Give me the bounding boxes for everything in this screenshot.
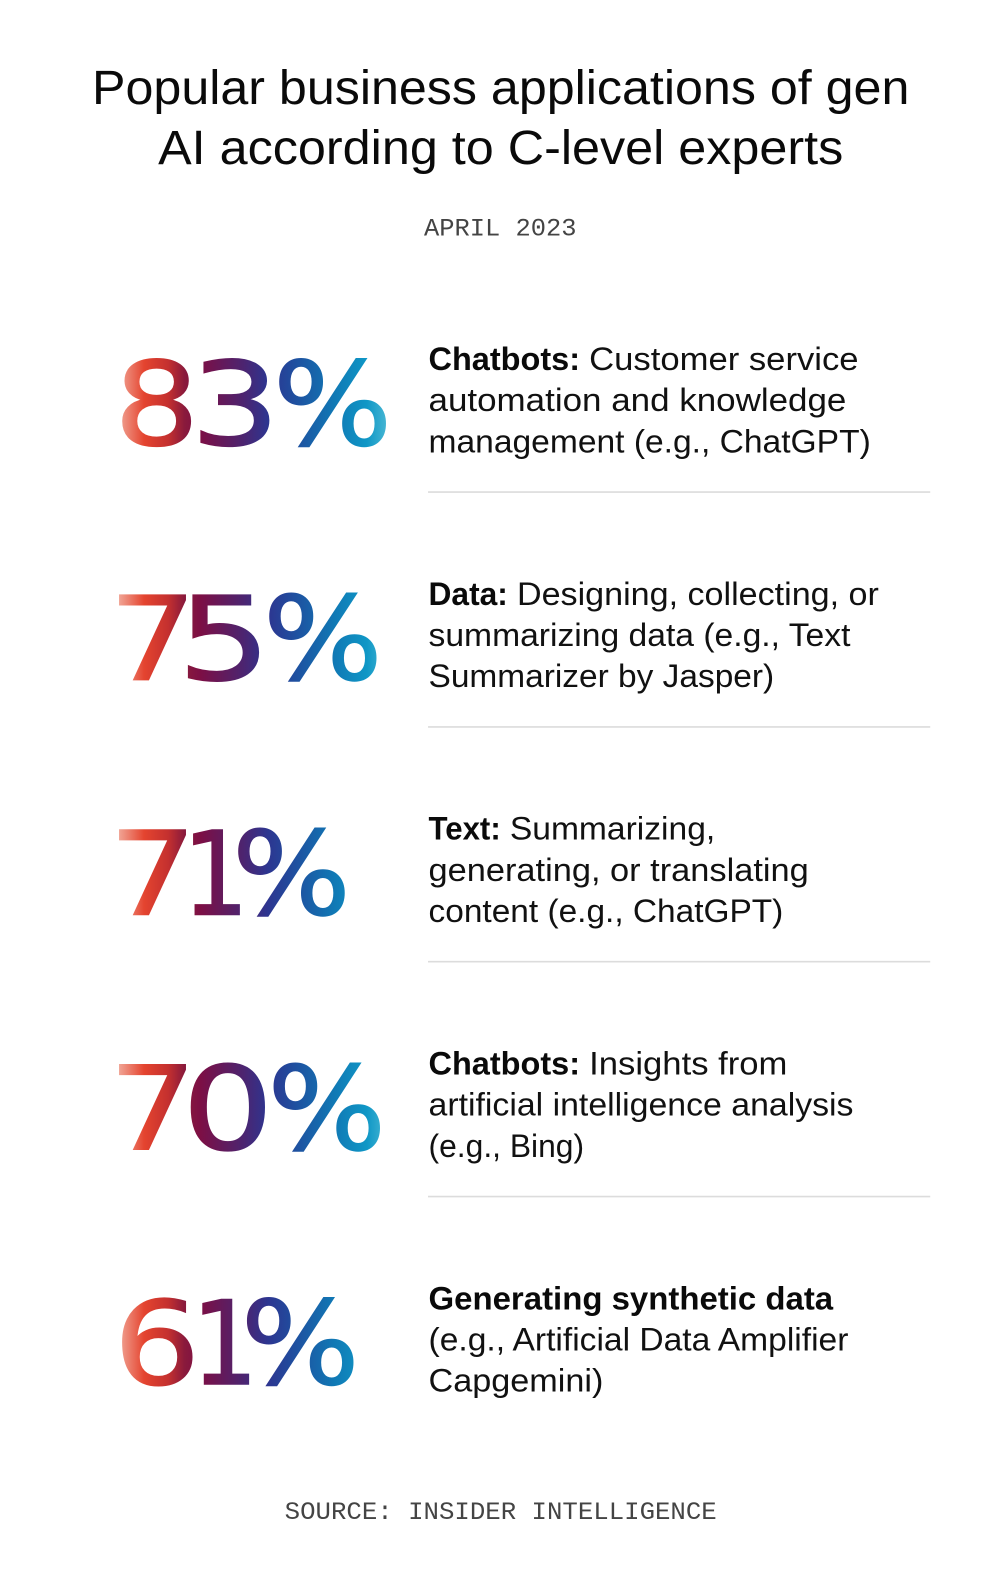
description: chatbots customer service: automation and knowledge [429,382,846,418]
stat: 70%: 0 [182,1042,274,1177]
description: synthetic data: (e.g., Artificial Data Amplifier [429,1322,849,1358]
stat: 83%: % [273,338,392,473]
stat: 61%: 1 [191,1277,258,1412]
stat: 75%: 5 [178,573,271,708]
stat: 70%: 7 [109,1042,197,1177]
source line: SOURCE: INSIDER INTELLIGENCE [285,1498,717,1527]
stat: 70%: % [268,1042,386,1177]
stat: 61% [113,1277,360,1412]
row: 83% chatbots [114,338,930,492]
stat: 61%: 6 [113,1277,200,1412]
title: AI according to C-level experts [158,122,843,175]
description: synthetic data: Generating synthetic data [429,1280,834,1316]
description: data: Summarizer by Jasper) [429,658,774,694]
stat: 70% [109,1042,386,1177]
description: chatbots customer service: Customer service [589,341,859,377]
stat: 83% [114,338,392,473]
description: chatbots customer service: management (e.g., ChatGPT) [429,423,871,459]
description: data: summarizing data (e.g., Text [429,617,850,653]
description: text: generating, or translating [429,852,809,888]
stat: 71%: 7 [109,807,197,942]
stat: 75%: % [263,573,383,708]
title [92,62,909,175]
description: chatbots customer service: Chatbots: [429,341,580,377]
stat: 71%: % [232,807,351,942]
description: text: Text: [429,811,501,847]
description: data [429,576,879,694]
row: 70% chatbots [109,1042,930,1197]
description: chatbots insights: Insights from [589,1046,787,1082]
stat: 61%: % [241,1277,360,1412]
date label: APRIL 2023 [424,214,576,243]
description: text: Summarizing, [510,811,715,847]
description: chatbots customer service [429,341,871,459]
description: chatbots insights: artificial intelligence analysis [429,1087,853,1123]
row: 61% synthetic data [113,1277,849,1412]
description: data: Data: [429,576,508,612]
row: 71% text [109,807,930,962]
description: text [429,811,809,929]
description: chatbots insights [429,1046,853,1164]
row: 75% data [109,573,930,727]
stat: 83%: 8 [114,338,199,473]
description: synthetic data [429,1280,849,1399]
description: text: content (e.g., ChatGPT) [429,893,783,929]
description: chatbots insights: Chatbots: [429,1046,580,1082]
title: Popular business applications of gen [92,62,909,115]
description: chatbots insights: (e.g., Bing) [429,1128,584,1164]
description: data: Designing, collecting, or [517,576,879,612]
stat: 83%: 3 [191,338,280,473]
description: synthetic data: Capgemini) [429,1363,603,1399]
stat: 71%: 1 [182,807,249,942]
stat: 75%: 7 [109,573,197,708]
stat: 75% [109,573,383,708]
stat: 71% [109,807,351,942]
